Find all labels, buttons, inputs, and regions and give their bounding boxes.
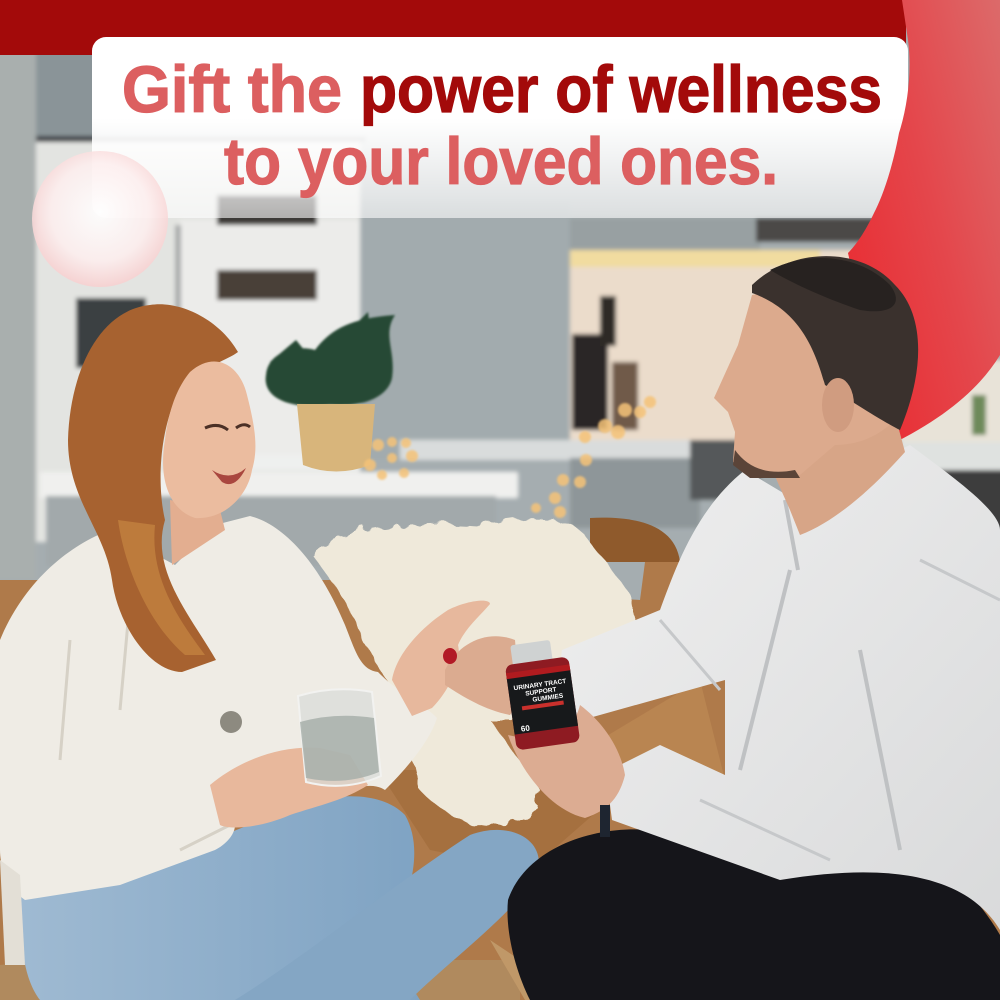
red curved swoosh	[848, 0, 1000, 445]
top dark red band	[0, 0, 906, 55]
man's lower hand	[508, 705, 625, 818]
man's neck and head	[714, 256, 918, 535]
bottle label: URINARY TRACT	[513, 678, 567, 692]
product bottle	[502, 638, 580, 750]
watch	[600, 805, 610, 837]
bottle label: 60	[520, 723, 531, 734]
red gummy held	[443, 648, 457, 664]
headline panel	[92, 37, 908, 218]
man's shirt	[555, 445, 1000, 930]
bottle label	[506, 664, 578, 735]
bottle label: GUMMIES	[532, 692, 564, 704]
icon: potted plant	[266, 312, 395, 472]
woman	[0, 304, 539, 1000]
woman's sweater	[0, 516, 437, 900]
sofa	[0, 518, 1000, 1000]
sheepskin cushion	[312, 518, 636, 825]
woman's neck	[170, 500, 225, 565]
headline	[122, 52, 882, 198]
man's trousers	[507, 829, 1000, 1000]
kitchen background	[0, 0, 1000, 610]
man	[445, 256, 1000, 1000]
headline: power of wellness	[360, 52, 882, 126]
headline: Gift the	[122, 52, 342, 126]
bottle body with gummies	[505, 656, 580, 750]
bokeh fairy lights	[364, 396, 656, 518]
woman's hand on glass	[210, 748, 368, 828]
bottle cap	[510, 640, 553, 667]
water glass	[298, 689, 381, 786]
headline: to your loved ones.	[224, 124, 778, 198]
woman's hair	[68, 304, 238, 672]
sweater button	[220, 711, 242, 733]
woman's face	[163, 362, 255, 518]
woman's raised hand	[392, 601, 490, 716]
man's upper hand	[445, 636, 520, 715]
bottle label: SUPPORT	[525, 686, 557, 698]
woman's jeans	[20, 796, 539, 1000]
translucent glass orb	[32, 151, 168, 287]
